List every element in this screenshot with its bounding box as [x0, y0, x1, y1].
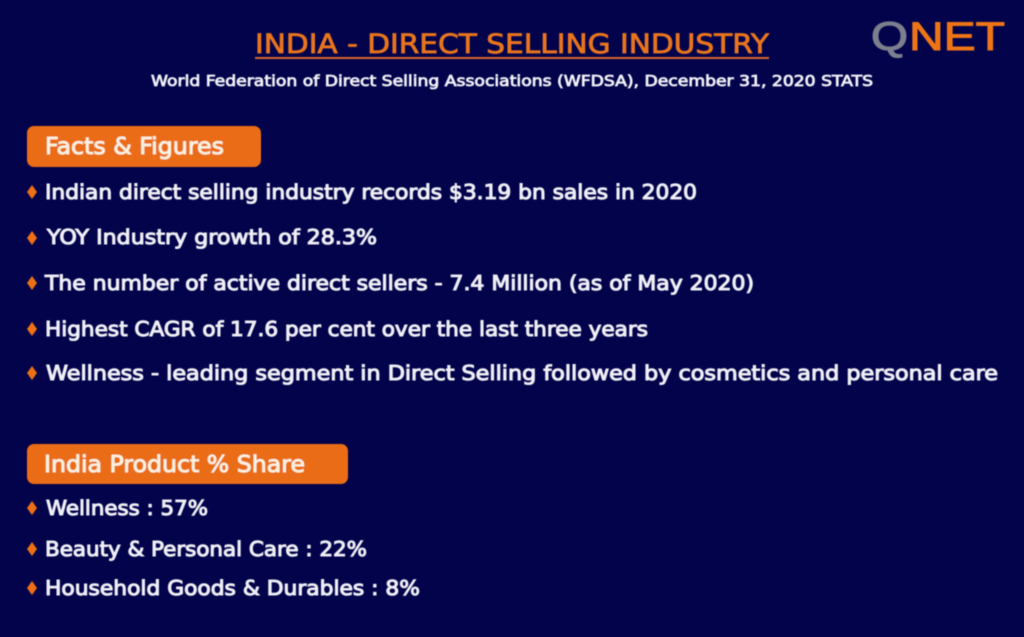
bullet: beauty share: Beauty & Personal Care : 22%: [45, 537, 367, 561]
heading: facts and figures: Facts & Figures: [45, 134, 224, 160]
title: INDIA - DIRECT SELLING INDUSTRY: [255, 29, 770, 60]
bullet: household share: Household Goods & Durables : 8%: [45, 576, 420, 600]
bullet: wellness share: Wellness : 57%: [46, 496, 208, 520]
bullet: active sellers: The number of active direct sellers - 7.4 Million (as of May 2020): [44, 271, 754, 295]
heading: product share: India Product % Share: [44, 452, 305, 478]
logo: QNET: NET: [909, 15, 1005, 59]
bullet: wellness segment: Wellness - leading segment in Direct Selling followed by cosmetics and personal care: [46, 361, 998, 385]
heading: product share: [27, 444, 348, 484]
panel: facts and figures: [27, 126, 998, 385]
subtitle: World Federation of Direct Selling Associations (WFDSA), December 31, 2020 STATS: [151, 72, 873, 90]
bullet: sales: Indian direct selling industry records $3.19 bn sales in 2020: [45, 180, 697, 204]
bullet: growth: YOY Industry growth of 28.3%: [46, 225, 377, 249]
logo: QNET: Q: [871, 15, 908, 59]
heading: facts and figures: [27, 126, 261, 167]
panel: product share: [27, 444, 420, 600]
logo: QNET: [871, 15, 1005, 59]
bullet: CAGR: Highest CAGR of 17.6 per cent over the last three years: [45, 317, 648, 341]
